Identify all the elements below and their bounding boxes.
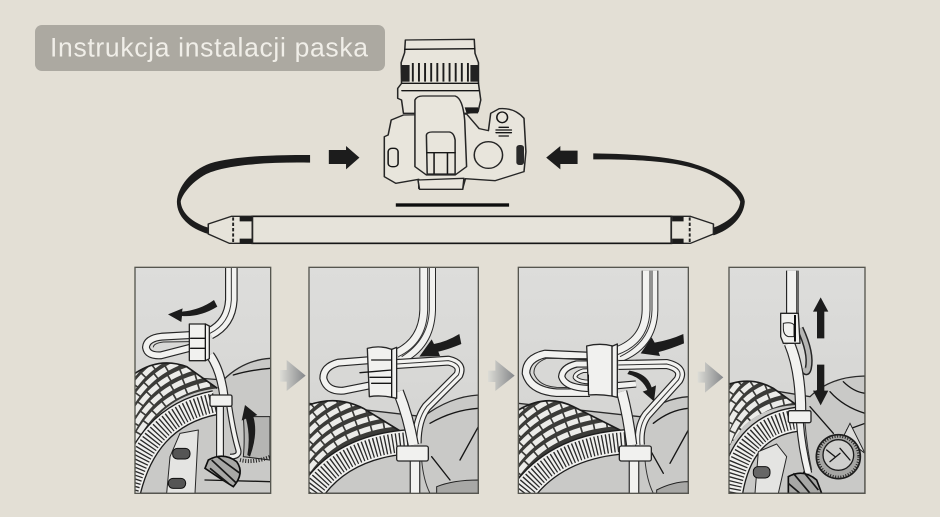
right strap — [593, 153, 745, 235]
bar under camera — [396, 203, 509, 207]
transition arrow 2 — [488, 360, 515, 391]
panel 3: tuck strap end — [518, 266, 689, 494]
panel 2: loop strap back — [308, 266, 479, 494]
right arrow — [546, 146, 578, 169]
title badge: Instrukcja instalacji paska — [50, 32, 368, 62]
panel 1: thread strap through the lug — [134, 266, 272, 494]
panels 3 and 4 — [488, 267, 865, 502]
camera top view — [384, 39, 526, 189]
strap pad — [252, 216, 671, 243]
strap and camera overview — [177, 39, 745, 243]
right strap end — [671, 216, 713, 243]
title badge — [35, 25, 385, 71]
transition arrow 1 — [280, 360, 306, 391]
left arrow — [329, 146, 359, 169]
panels 1 and 2 — [105, 267, 478, 500]
left strap — [177, 155, 310, 234]
transition arrow 3 — [698, 362, 723, 393]
panel 4: pull strap tight — [728, 266, 866, 494]
left strap end — [208, 216, 252, 243]
